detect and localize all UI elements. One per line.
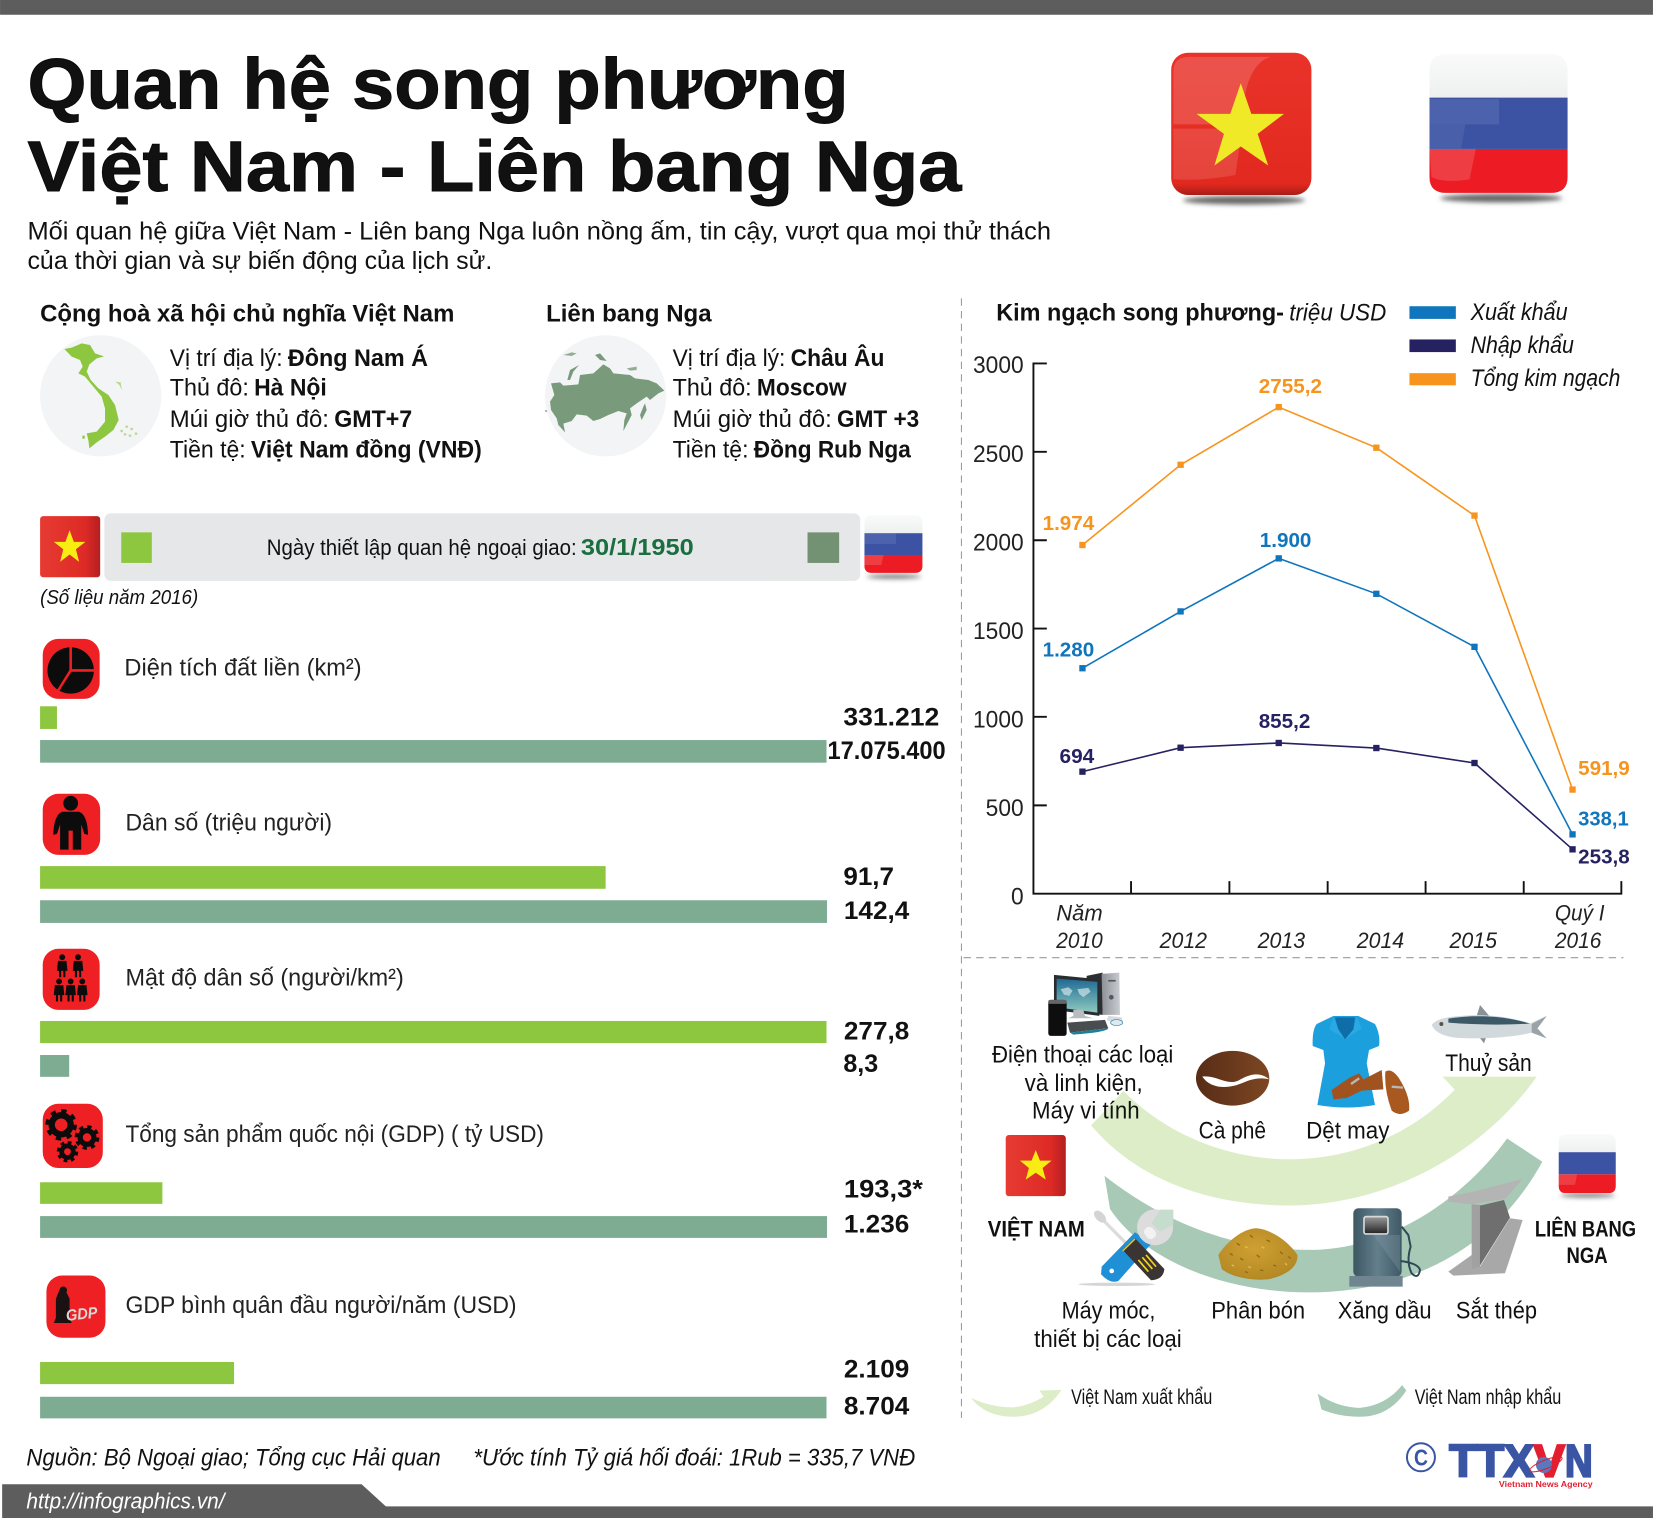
details: Vietnam: Việt Nam đồng (VNĐ) xyxy=(251,437,482,464)
note: data year: (Số liệu năm 2016) xyxy=(40,587,198,609)
icon: Vietnam map xyxy=(40,335,161,456)
data labels: total trade: 591,9 xyxy=(1578,758,1630,780)
value: Vietnam: 277,8 xyxy=(844,1017,909,1045)
title xyxy=(27,45,963,207)
icon: gears xyxy=(43,1104,103,1168)
icon: tools xyxy=(1078,1208,1173,1286)
label: fuel: Xăng dầu xyxy=(1338,1298,1432,1325)
data labels: total trade xyxy=(1043,376,1630,780)
bar: Vietnam xyxy=(40,1182,162,1204)
label: GDP bình quân đầu người/năm (USD) xyxy=(125,1292,517,1319)
details: Vietnam: Đông Nam Á xyxy=(288,344,428,372)
icon: coffee bean xyxy=(1196,1051,1269,1106)
label: textile: Dệt may xyxy=(1306,1117,1390,1144)
panel: population density xyxy=(40,949,909,1078)
label: fertilizer: Phân bón xyxy=(1211,1298,1305,1325)
bar: Vietnam xyxy=(40,866,606,889)
arrow: Vietnam exports xyxy=(1091,1077,1537,1205)
legend: import arrow: Việt Nam nhập khẩu xyxy=(1415,1386,1561,1409)
panel: GDP xyxy=(40,1104,923,1238)
title: Quan hệ song phương xyxy=(27,45,849,125)
source note: Nguồn: Bộ Ngoại giao; Tổng cục Hải quan xyxy=(26,1444,441,1471)
panel: Vietnam profile xyxy=(40,301,482,464)
icon: fish xyxy=(1432,1005,1547,1043)
legend: export arrow: Việt Nam xuất khẩu xyxy=(1071,1386,1212,1409)
footer url: http://infographics.vn/ xyxy=(26,1489,227,1514)
label: Vietnam: VIỆT NAM xyxy=(988,1217,1085,1242)
icon: Russia map xyxy=(545,335,666,456)
data labels: total trade: 2755,2 xyxy=(1259,376,1322,398)
logo: TTXVN: TTX xyxy=(1449,1436,1534,1487)
icon: large Vietnam flag xyxy=(1171,53,1311,205)
label: machinery: thiết bị các loại xyxy=(1034,1326,1182,1353)
label: electronics: Máy vi tính xyxy=(1032,1097,1140,1124)
bar: Russia xyxy=(40,900,827,923)
y axis labels: 3000 xyxy=(973,352,1024,379)
label: coffee: Cà phê xyxy=(1199,1117,1266,1144)
logo: TTXVN xyxy=(1407,1436,1593,1489)
details: Vietnam xyxy=(170,344,482,464)
label: Russia: NGA xyxy=(1567,1243,1608,1268)
label: electronics xyxy=(992,1042,1173,1124)
value: Russia: 1.236 xyxy=(844,1210,909,1238)
legend square: Russia xyxy=(808,532,839,563)
intro text xyxy=(27,217,1051,275)
panel: GDP per capita xyxy=(40,1276,909,1421)
x axis labels: 2015 xyxy=(1449,928,1498,953)
legend: import arrow xyxy=(1318,1385,1561,1417)
bar: Russia xyxy=(40,1216,827,1238)
icon: fuel pump xyxy=(1349,1208,1420,1287)
label: Russia xyxy=(1535,1217,1636,1268)
value: Vietnam: 331.212 xyxy=(843,703,939,731)
details: Vietnam: Múi giờ thủ đô: xyxy=(170,406,329,433)
icon: Russia flag small xyxy=(864,515,922,579)
icon: GDP figure xyxy=(46,1276,105,1338)
date bar xyxy=(104,513,860,581)
details: Russia: Đồng Rub Nga xyxy=(754,437,911,464)
value: Vietnam: 2.109 xyxy=(844,1355,909,1383)
label: machinery xyxy=(1034,1298,1182,1353)
heading: Russia: Liên bang Nga xyxy=(546,301,712,328)
details: Russia xyxy=(673,344,919,464)
icon: GDP figure: GDP xyxy=(65,1305,99,1325)
heading: Vietnam: Cộng hoà xã hội chủ nghĩa Việt Nam xyxy=(40,301,454,328)
data labels: imports xyxy=(1059,711,1630,868)
value: Vietnam: 193,3* xyxy=(844,1176,923,1204)
line: total trade xyxy=(1079,404,1576,793)
y axis labels: 500 xyxy=(986,795,1024,822)
y axis labels: 2500 xyxy=(973,441,1024,468)
data labels: exports: 1.280 xyxy=(1043,640,1094,662)
value: Russia: 8.704 xyxy=(844,1393,909,1421)
bar: Vietnam xyxy=(40,1021,826,1043)
details: Russia: Vị trí địa lý: xyxy=(673,345,785,372)
source note xyxy=(26,1444,915,1471)
label: machinery: Máy móc, xyxy=(1062,1298,1155,1325)
legend: export arrow xyxy=(971,1386,1212,1417)
top bar xyxy=(0,0,1653,15)
y axis labels: 1500 xyxy=(973,618,1024,645)
chart legend: Nhập khẩu xyxy=(1471,332,1574,359)
icon: person xyxy=(43,794,100,855)
arrow: Vietnam imports xyxy=(1104,1138,1542,1292)
icon: pie chart xyxy=(43,639,100,699)
details: Russia: Múi giờ thủ đô: xyxy=(673,406,832,433)
details: Vietnam: Hà Nội xyxy=(254,374,327,401)
data labels: imports: 253,8 xyxy=(1578,846,1630,868)
x axis labels: 2010 xyxy=(1055,928,1103,953)
chart title: triệu USD xyxy=(1289,299,1386,326)
data labels: exports: 1.900 xyxy=(1260,530,1311,552)
x axis labels: 2013 xyxy=(1257,928,1306,953)
chart title: Kim ngạch song phương- xyxy=(996,299,1284,326)
label: Dân số (triệu người) xyxy=(125,810,332,837)
date text: 30/1/1950 xyxy=(581,534,694,560)
label: Diện tích đất liền (km²) xyxy=(124,655,362,682)
details: Russia: Thủ đô: xyxy=(673,374,752,401)
value: Russia: 142,4 xyxy=(844,897,909,925)
x axis labels: Quý I xyxy=(1555,900,1604,925)
x axis labels xyxy=(1055,900,1604,953)
details: Vietnam: GMT+7 xyxy=(334,406,412,433)
legend square: Vietnam xyxy=(121,532,152,563)
label: seafood: Thuỷ sản xyxy=(1445,1050,1532,1077)
details: Russia: Tiền tệ: xyxy=(673,437,748,464)
bar: Russia xyxy=(40,1397,826,1418)
y axis labels xyxy=(973,352,1024,910)
label: Russia: LIÊN BANG xyxy=(1535,1217,1636,1242)
icon: steel beam xyxy=(1448,1179,1523,1276)
y axis labels: 2000 xyxy=(973,529,1024,556)
label: electronics: Điện thoại các loại xyxy=(992,1042,1173,1069)
icon: shirt and shoes xyxy=(1313,1016,1409,1114)
panel: Russia profile xyxy=(545,301,919,464)
details: Vietnam: Thủ đô: xyxy=(170,374,249,401)
logo: TTXVN: Vietnam News Agency xyxy=(1499,1479,1593,1489)
x axis labels: 2014 xyxy=(1356,928,1404,953)
y axis labels: 0 xyxy=(1011,883,1024,910)
value: Russia: 8,3 xyxy=(843,1050,878,1078)
icon: large Russia flag xyxy=(1429,54,1568,202)
value: Russia: 17.075.400 xyxy=(828,737,946,765)
data labels: exports xyxy=(1043,530,1629,830)
bar: Vietnam xyxy=(40,1362,234,1384)
panel: population xyxy=(40,794,909,925)
details: Russia: GMT +3 xyxy=(837,406,919,433)
bar: Russia xyxy=(40,1055,69,1077)
bar: Russia xyxy=(40,740,826,763)
axes xyxy=(1033,363,1621,894)
y axis labels: 1000 xyxy=(973,706,1024,733)
value: Vietnam: 91,7 xyxy=(843,863,894,891)
icon: fertilizer pile xyxy=(1218,1228,1297,1280)
x axis labels: Năm xyxy=(1056,900,1103,925)
details: Vietnam: Tiền tệ: xyxy=(170,437,246,464)
panel: traded goods xyxy=(971,973,1636,1417)
data labels: exports: 338,1 xyxy=(1578,808,1629,830)
logo: TTXVN: V xyxy=(1534,1436,1566,1487)
line: exports xyxy=(1079,555,1576,838)
icon: computer and phone xyxy=(1048,973,1123,1036)
data labels: total trade: 1.974 xyxy=(1043,513,1095,535)
icon: Vietnam flag small xyxy=(40,516,100,577)
panel: land area xyxy=(40,639,946,765)
chart legend: Tổng kim ngạch xyxy=(1471,365,1620,392)
icon: group of people xyxy=(43,949,100,1010)
chart legend: Xuất khẩu xyxy=(1470,299,1568,326)
label: steel: Sắt thép xyxy=(1456,1298,1537,1325)
date text: Ngày thiết lập quan hệ ngoại giao: xyxy=(267,535,577,560)
panel: bilateral trade chart xyxy=(973,299,1630,953)
footer bar xyxy=(2,1484,1653,1518)
x axis labels: 2012 xyxy=(1159,928,1207,953)
details: Vietnam: Vị trí địa lý: xyxy=(170,345,283,372)
logo: TTXVN: N xyxy=(1565,1436,1593,1487)
chart legend xyxy=(1409,299,1620,392)
line: imports xyxy=(1079,740,1576,853)
x axis labels: 2016 xyxy=(1554,928,1602,953)
bar: Vietnam xyxy=(40,706,57,729)
intro text: của thời gian và sự biến động của lịch sử. xyxy=(27,247,492,275)
data labels: imports: 855,2 xyxy=(1259,711,1310,733)
label: electronics: và linh kiện, xyxy=(1025,1070,1143,1097)
source note: *Ước tính Tỷ giá hối đoái: 1Rub = 335,7 VNĐ xyxy=(473,1444,915,1471)
label: Tổng sản phẩm quốc nội (GDP) ( tỷ USD) xyxy=(125,1121,544,1148)
panel: diplomatic relations banner xyxy=(40,513,922,581)
label: Mật độ dân số (người/km²) xyxy=(125,965,404,992)
title: Việt Nam - Liên bang Nga xyxy=(27,127,963,207)
logo: TTXVN: C xyxy=(1414,1445,1428,1471)
icon: Russia flag medium xyxy=(1559,1134,1616,1198)
data labels: imports: 694 xyxy=(1059,746,1095,768)
icon: Vietnam flag medium xyxy=(1006,1135,1066,1196)
intro text: Mối quan hệ giữa Việt Nam - Liên bang Nga luôn nồng ấm, tin cậy, vượt qua mọi thử thách xyxy=(27,217,1051,245)
details: Russia: Moscow xyxy=(757,374,847,401)
details: Russia: Châu Âu xyxy=(791,344,884,372)
